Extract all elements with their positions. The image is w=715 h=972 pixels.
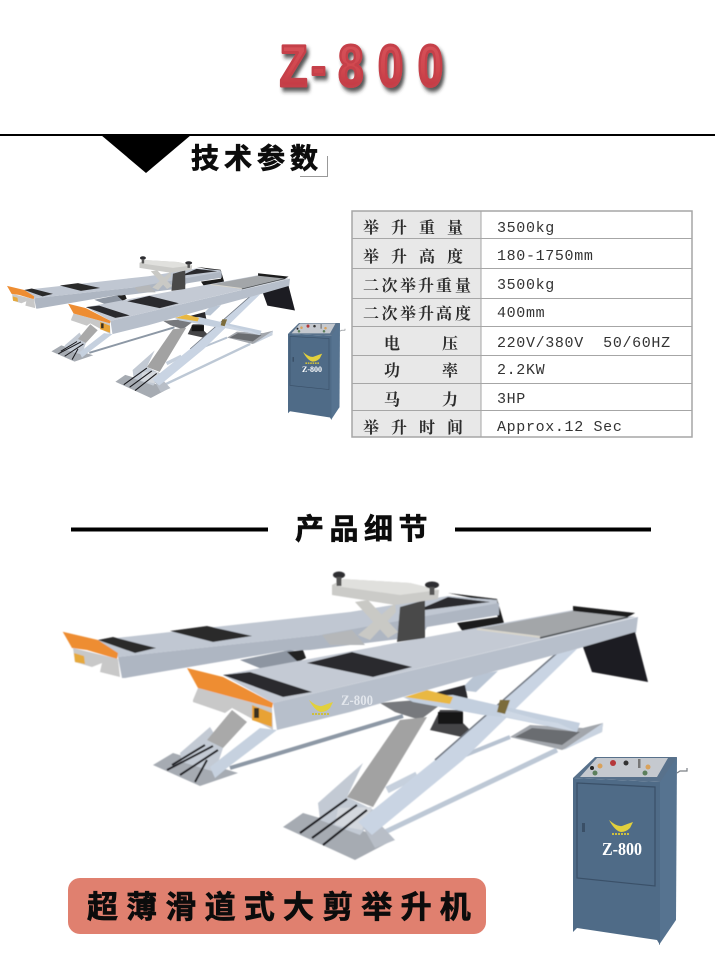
- label column background: [352, 211, 481, 437]
- row: lifting weight: 举升重量: [363, 218, 463, 237]
- large product image: lift: [63, 572, 648, 860]
- row: secondary lifting weight: 二次举升重量: [363, 276, 471, 295]
- heading: technical parameters: 技术参数: [191, 143, 323, 174]
- large product image: control cabinet: Z-800: [602, 839, 642, 859]
- row: power: 2.2KW: [497, 362, 545, 379]
- small product image: lift: [7, 256, 295, 398]
- small product image: control cabinet: Z-800: [302, 365, 322, 374]
- row: lifting height: 举升高度: [363, 247, 463, 266]
- row: horsepower: [384, 390, 526, 409]
- row: voltage: 220V/380V 50/60HZ: [497, 335, 671, 352]
- row: lifting weight: [363, 218, 555, 237]
- banner: 超薄滑道式大剪举升机: [87, 890, 479, 925]
- row: lifting height: [363, 247, 594, 266]
- row: secondary lifting weight: 3500kg: [497, 277, 555, 294]
- spec table: [352, 211, 692, 437]
- divider line with triangle: [0, 134, 715, 173]
- row: power: 功率: [384, 361, 459, 380]
- row: voltage: 电压: [384, 335, 458, 353]
- row: horsepower: 3HP: [497, 391, 526, 408]
- row: lifting time: 举升时间: [363, 418, 463, 437]
- title: Z-800: [280, 35, 443, 99]
- small product image: control cabinet: [288, 323, 345, 420]
- table grid: [352, 211, 692, 437]
- large product image: lift: Z-800: [341, 693, 373, 709]
- row: power: [384, 361, 545, 380]
- heading: product details: 产品细节: [295, 513, 433, 546]
- row: lifting height: 180-1750mm: [497, 248, 594, 265]
- row: lifting time: Approx.12 Sec: [497, 419, 622, 436]
- heading: product details: [71, 513, 651, 546]
- banner: [68, 878, 486, 934]
- large product image: control cabinet: [573, 757, 687, 945]
- row: lifting time: [363, 418, 622, 437]
- row: horsepower: 马力: [384, 390, 458, 409]
- row: secondary lifting height: [363, 304, 545, 323]
- row: secondary lifting height: 400mm: [497, 305, 545, 322]
- row: secondary lifting weight: [363, 276, 555, 295]
- row: secondary lifting height: 二次举升高度: [363, 304, 471, 323]
- row: voltage: [384, 335, 671, 353]
- row: lifting weight: 3500kg: [497, 220, 555, 237]
